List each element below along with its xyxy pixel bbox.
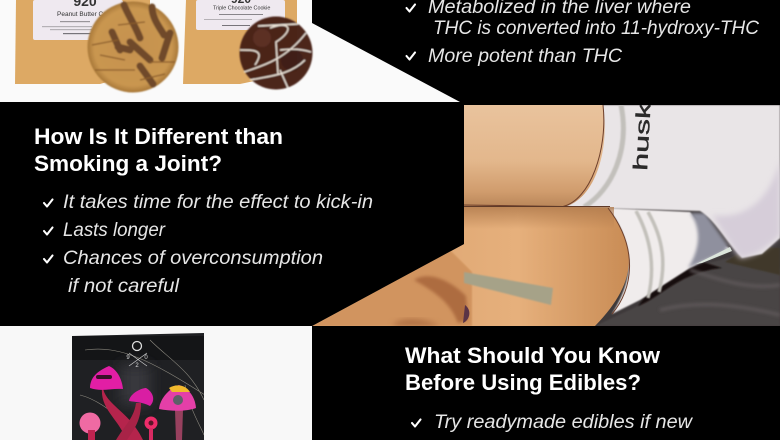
upper thigh (464, 105, 605, 207)
icon: peanut butter cookie (88, 2, 178, 92)
text: try readymade: Try readymade edibles if new (434, 412, 693, 433)
text block: liver metabolism (406, 0, 759, 67)
icon: check (44, 200, 52, 206)
panel: mushroom product photo (0, 326, 312, 440)
icon: 920 logo: 2 (135, 363, 139, 369)
icon: check (44, 256, 52, 262)
icon: check (406, 52, 415, 60)
lower thigh (312, 206, 629, 326)
text: lasts longer: Lasts longer (63, 220, 166, 241)
icon: peanut butter cookie bag (15, 0, 150, 84)
icon: triple chocolate cookie (240, 16, 312, 90)
icon: 920 logo: 9 (126, 355, 130, 361)
text: kick-in: It takes time for the effect to kick-in (63, 192, 373, 213)
icon: triple chocolate cookie bag (183, 0, 297, 84)
icon: mushrooms (80, 366, 196, 440)
photo: hand holding a joint on legs (312, 86, 780, 326)
icon: mushroom bag (72, 333, 205, 440)
text: overconsumption: Chances of overconsumption (63, 248, 323, 269)
text block: what should you know (405, 343, 693, 433)
heading: how is it different: Smoking a Joint? (34, 151, 222, 176)
hand (312, 250, 472, 326)
icon: check (44, 228, 52, 234)
upper sock (563, 105, 780, 258)
lower sock (608, 208, 730, 314)
icon: 920 logo: 0 (144, 355, 148, 361)
text: converted line: THC is converted into 11-hydroxy-THC (433, 18, 759, 39)
text block: how is it different (34, 124, 373, 297)
panel: bottom right black (312, 326, 780, 440)
heading: what should you know: What Should You Know (405, 343, 661, 368)
heading: what should you know: Before Using Edibles? (405, 370, 641, 395)
text: if not careful: if not careful (68, 276, 180, 297)
panel: cookie product photo (0, 0, 460, 102)
panel: top right black with diagonal cut (312, 0, 780, 105)
icon: 920 logo (126, 342, 148, 369)
icon: triple chocolate cookie bag: Triple Chocolate Cookie (213, 6, 270, 12)
icon: check (412, 420, 420, 426)
text: more potent: More potent than THC (428, 46, 622, 67)
icon: peanut butter cookie bag: Peanut Butter Cookie (57, 11, 119, 18)
dark blanket (595, 255, 780, 326)
heading: how is it different (34, 124, 283, 176)
text: sock brand: husky (630, 86, 656, 171)
heading: what should you know (405, 343, 661, 395)
panel: left black with diagonal cut (0, 102, 464, 326)
icon: check (406, 4, 415, 12)
heading: how is it different: How Is It Different than (34, 124, 283, 149)
joint (464, 272, 553, 305)
